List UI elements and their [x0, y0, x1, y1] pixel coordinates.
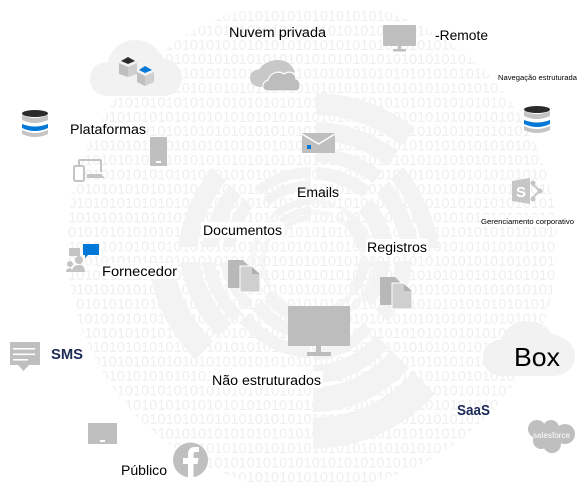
label: SMS: SMS [51, 347, 83, 363]
binary digit background: 0101010101010101010101010101010101010101010101010101010101010101 [60, 153, 579, 169]
arc sector: south to south-west [240, 290, 310, 358]
arc sector: north-west to north [257, 167, 311, 229]
label: Emails: Emails [297, 185, 339, 200]
icon: Box cloud with label [483, 321, 575, 376]
binary digit background: 1010101010101010101010101010101010101010101010101010101010101010 [60, 455, 579, 471]
binary digit background: 1010101010101010101010101010101010101010101010101010101010101010 [60, 283, 579, 299]
binary digit background: 1010101010101010101010101010101010101010101010101010101010101010 [60, 167, 579, 183]
icon: devices [74, 160, 105, 181]
label: Plataformas: Plataformas [70, 122, 146, 137]
binary digit background: 1010101010101010101010101010101010101010101010101010101010101010 [60, 23, 579, 39]
binary digit background: 0101010101010101010101010101010101010101010101010101010101010101 [60, 67, 579, 83]
icon: vendor people chat [66, 244, 99, 272]
binary digit background: 0101010101010101010101010101010101010101010101010101010101010101 [60, 441, 579, 457]
binary digit background: 1010101010101010101010101010101010101010101010101010101010101010 [60, 52, 579, 68]
binary digit background: 1010101010101010101010101010101010101010101010101010101010101010 [60, 254, 579, 270]
label: Navegação estruturada: Navegação estruturada [498, 73, 578, 82]
icon: SMS message [10, 342, 40, 371]
binary digit background: 0101010101010101010101010101010101010101010101010101010101010101 [60, 268, 579, 284]
icon: Salesforce cloud: salesforce [533, 431, 571, 440]
binary digit background: 1010101010101010101010101010101010101010101010101010101010101010 [60, 81, 579, 97]
icon: database left [22, 110, 48, 137]
icon: SharePoint: S [516, 184, 526, 201]
label: Fornecedor: Fornecedor [102, 264, 178, 279]
binary digit background: 0101010101010101010101010101010101010101010101010101010101010101 [60, 9, 579, 25]
binary digit background: 1010101010101010101010101010101010101010101010101010101010101010 [60, 427, 579, 443]
binary digit background: 0101010101010101010101010101010101010101010101010101010101010101 [60, 326, 579, 342]
binary digit background: 1010101010101010101010101010101010101010101010101010101010101010 [60, 139, 579, 155]
binary digit background: 0101010101010101010101010101010101010101010101010101010101010101 [60, 355, 579, 371]
binary digit background: 1010101010101010101010101010101010101010101010101010101010101010 [60, 398, 579, 414]
binary digit background: 0101010101010101010101010101010101010101010101010101010101010101 [60, 124, 579, 140]
icon: SharePoint [512, 178, 542, 204]
binary digit background: 0101010101010101010101010101010101010101010101010101010101010101 [60, 239, 579, 255]
arc sector: south-east to south [313, 324, 434, 448]
binary digit background: 1010101010101010101010101010101010101010101010101010101010101010 [60, 110, 579, 126]
arc sector: east to south-east [350, 261, 412, 322]
arc sector: north to north-east [316, 93, 415, 198]
icon: Box cloud with label: Box [514, 342, 560, 372]
icon: tablet [88, 423, 117, 444]
binary digit background: 0101010101010101010101010101010101010101010101010101010101010101 [60, 383, 579, 399]
icon: documents right [380, 277, 412, 309]
binary digit background: 0101010101010101010101010101010101010101010101010101010101010101 [60, 95, 579, 111]
binary digit background: 0101010101010101010101010101010101010101010101010101010101010101 [60, 297, 579, 313]
icon: email [302, 133, 335, 153]
label: SaaS: SaaS [457, 403, 490, 419]
icon: Salesforce cloud [528, 420, 575, 453]
icon: Facebook [173, 442, 208, 478]
arc sector: south-west to west [148, 262, 253, 359]
label: -Remote: -Remote [435, 28, 488, 43]
arc sector: north-east to east [348, 168, 439, 248]
label: Documentos: Documentos [203, 223, 282, 238]
concentric arc sectors [148, 93, 439, 448]
binary digit background: 0101010101010101010101010101010101010101010101010101010101010101 [60, 211, 579, 227]
label: Gerenciamento corporativo: Gerenciamento corporativo [481, 217, 574, 226]
icon: documents left [228, 260, 260, 292]
binary digit background: 1010101010101010101010101010101010101010101010101010101010101010 [60, 225, 579, 241]
binary digit background: 1010101010101010101010101010101010101010101010101010101010101010 [60, 369, 579, 385]
label: Registros: Registros [367, 240, 427, 255]
icon: phone [150, 137, 167, 166]
binary digit background: 1010101010101010101010101010101010101010101010101010101010101010 [60, 340, 579, 356]
icon: large monitor [288, 306, 350, 356]
binary digit background: 0101010101010101010101010101010101010101010101010101010101010101 [60, 182, 579, 198]
icon: OneDrive cloud [250, 60, 300, 91]
arc sector: west to north-west [178, 168, 252, 247]
label: Não estruturados: Não estruturados [212, 373, 321, 388]
binary digit background: 1010101010101010101010101010101010101010101010101010101010101010 [60, 311, 579, 327]
binary digit background: 0101010101010101010101010101010101010101010101010101010101010101 [60, 38, 579, 54]
binary digit background: 1010101010101010101010101010101010101010101010101010101010101010 [60, 196, 579, 212]
icon: database right [524, 106, 550, 133]
inner rings [253, 202, 373, 322]
icon: remote monitor [383, 25, 416, 52]
binary digit background: 0101010101010101010101010101010101010101010101010101010101010101 [60, 412, 579, 428]
icon: private cloud with cubes [90, 40, 182, 96]
label: Nuvem privada: Nuvem privada [229, 25, 327, 40]
binary digit background: 0101010101010101010101010101010101010101010101010101010101010101 [60, 470, 579, 486]
label: Público: Público [121, 463, 167, 478]
